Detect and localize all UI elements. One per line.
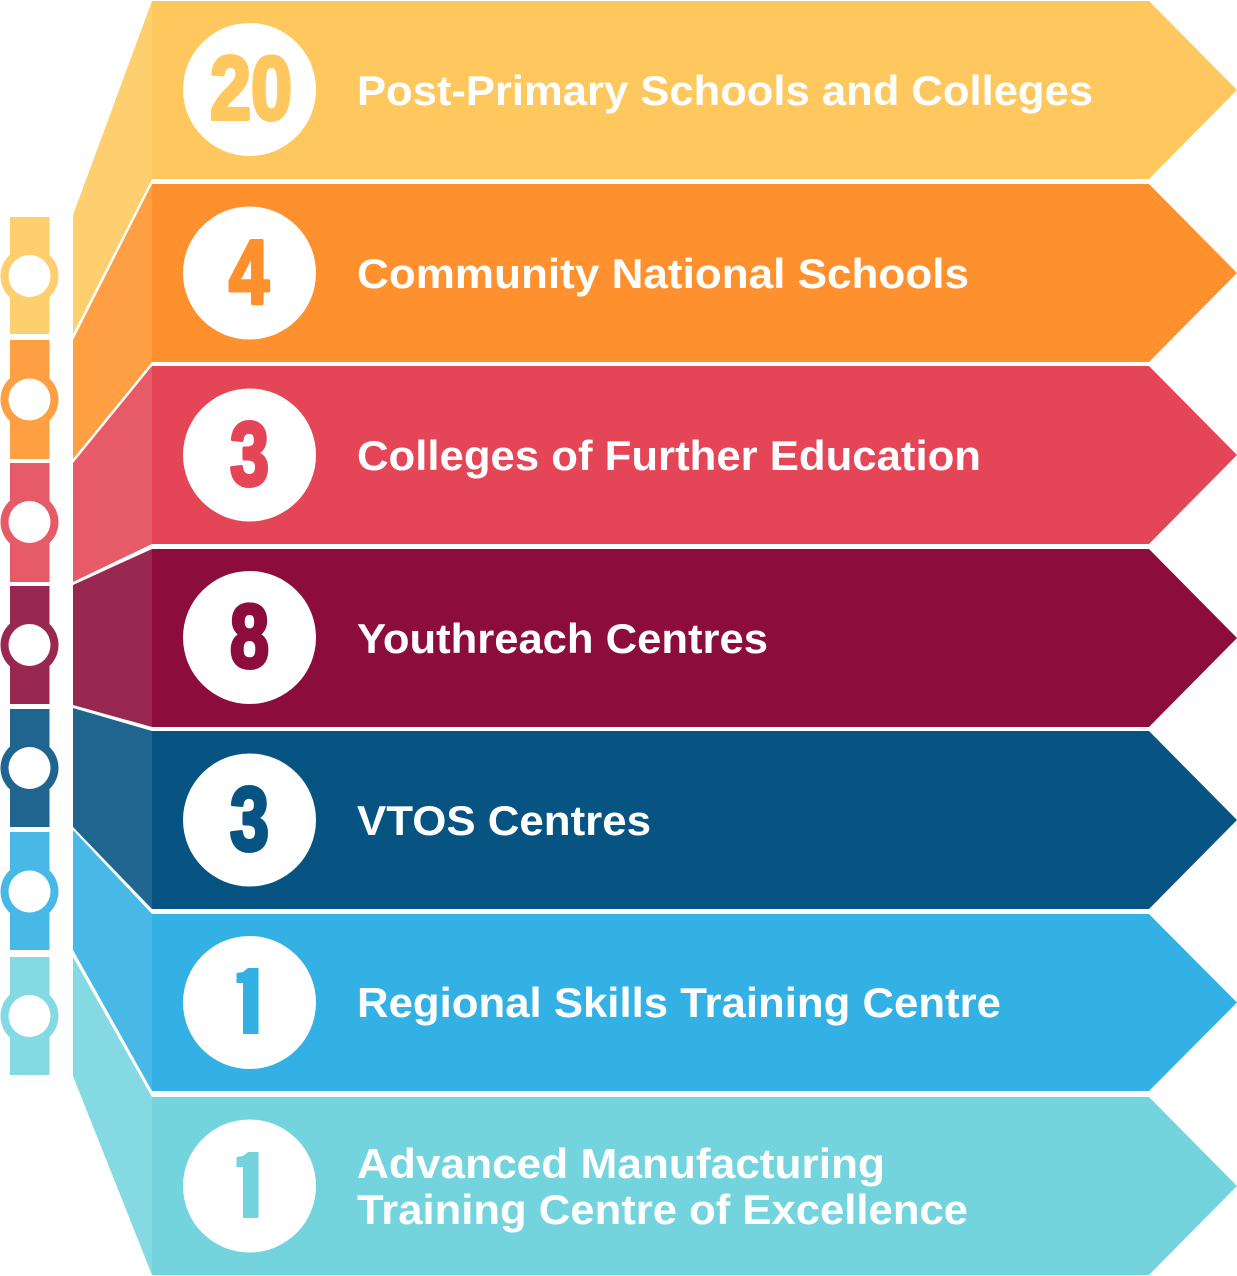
number badge xyxy=(183,388,316,522)
label: VTOS Centres xyxy=(357,797,651,844)
band: 3 VTOS Centres xyxy=(73,708,1237,909)
label: Post-Primary Schools and Colleges xyxy=(357,67,1093,114)
number badge: 3 xyxy=(230,770,269,870)
fold panel xyxy=(73,708,152,909)
band: 3 Colleges of Further Education xyxy=(73,366,1237,582)
number badge xyxy=(183,936,316,1069)
arrow body xyxy=(152,549,1237,727)
label: Youthreach Centres xyxy=(357,615,768,662)
tab: navy xyxy=(0,709,58,827)
arrow body xyxy=(152,1097,1237,1275)
arrow body xyxy=(152,914,1237,1091)
tab: aqua xyxy=(0,957,58,1075)
band: 20 Post-Primary Schools and Colleges xyxy=(73,1,1237,334)
band: 1 Regional Skills Training Centre xyxy=(73,830,1237,1091)
label: Regional Skills Training Centre xyxy=(357,979,1001,1026)
arrow body xyxy=(152,1,1237,179)
label: Training Centre of Excellence xyxy=(357,1186,968,1233)
number badge: 20 xyxy=(210,39,292,139)
tab: red xyxy=(0,463,58,582)
band: 8 Youthreach Centres xyxy=(73,549,1237,727)
number badge: 8 xyxy=(230,587,269,687)
label: Advanced Manufacturing xyxy=(357,1140,885,1187)
fold panel xyxy=(73,1,152,334)
tab: yellow xyxy=(0,217,58,334)
number badge xyxy=(183,754,316,886)
band: 4 Community National Schools xyxy=(73,184,1237,459)
number badge: 4 xyxy=(229,223,269,323)
arrow body xyxy=(152,731,1237,909)
tab: blue xyxy=(0,832,58,950)
number badge xyxy=(183,206,316,340)
label xyxy=(357,1140,968,1233)
number badge xyxy=(183,1120,316,1252)
fold panel xyxy=(73,366,152,582)
timeline tabs xyxy=(0,217,58,1075)
number badge xyxy=(183,23,316,156)
arrow body xyxy=(152,366,1237,544)
fold panel xyxy=(73,830,152,1091)
label: Colleges of Further Education xyxy=(357,432,981,479)
label: Community National Schools xyxy=(357,250,969,297)
tab: maroon xyxy=(0,586,58,704)
tab: orange xyxy=(0,340,58,459)
arrow body xyxy=(152,184,1237,362)
fold panel xyxy=(73,549,152,727)
fold panel xyxy=(73,957,152,1275)
band: 1 Advanced Manufacturing Training Centre of Excellence xyxy=(73,957,1237,1275)
number badge xyxy=(183,571,316,704)
number badge: 3 xyxy=(230,405,269,505)
fold panel xyxy=(73,184,152,459)
